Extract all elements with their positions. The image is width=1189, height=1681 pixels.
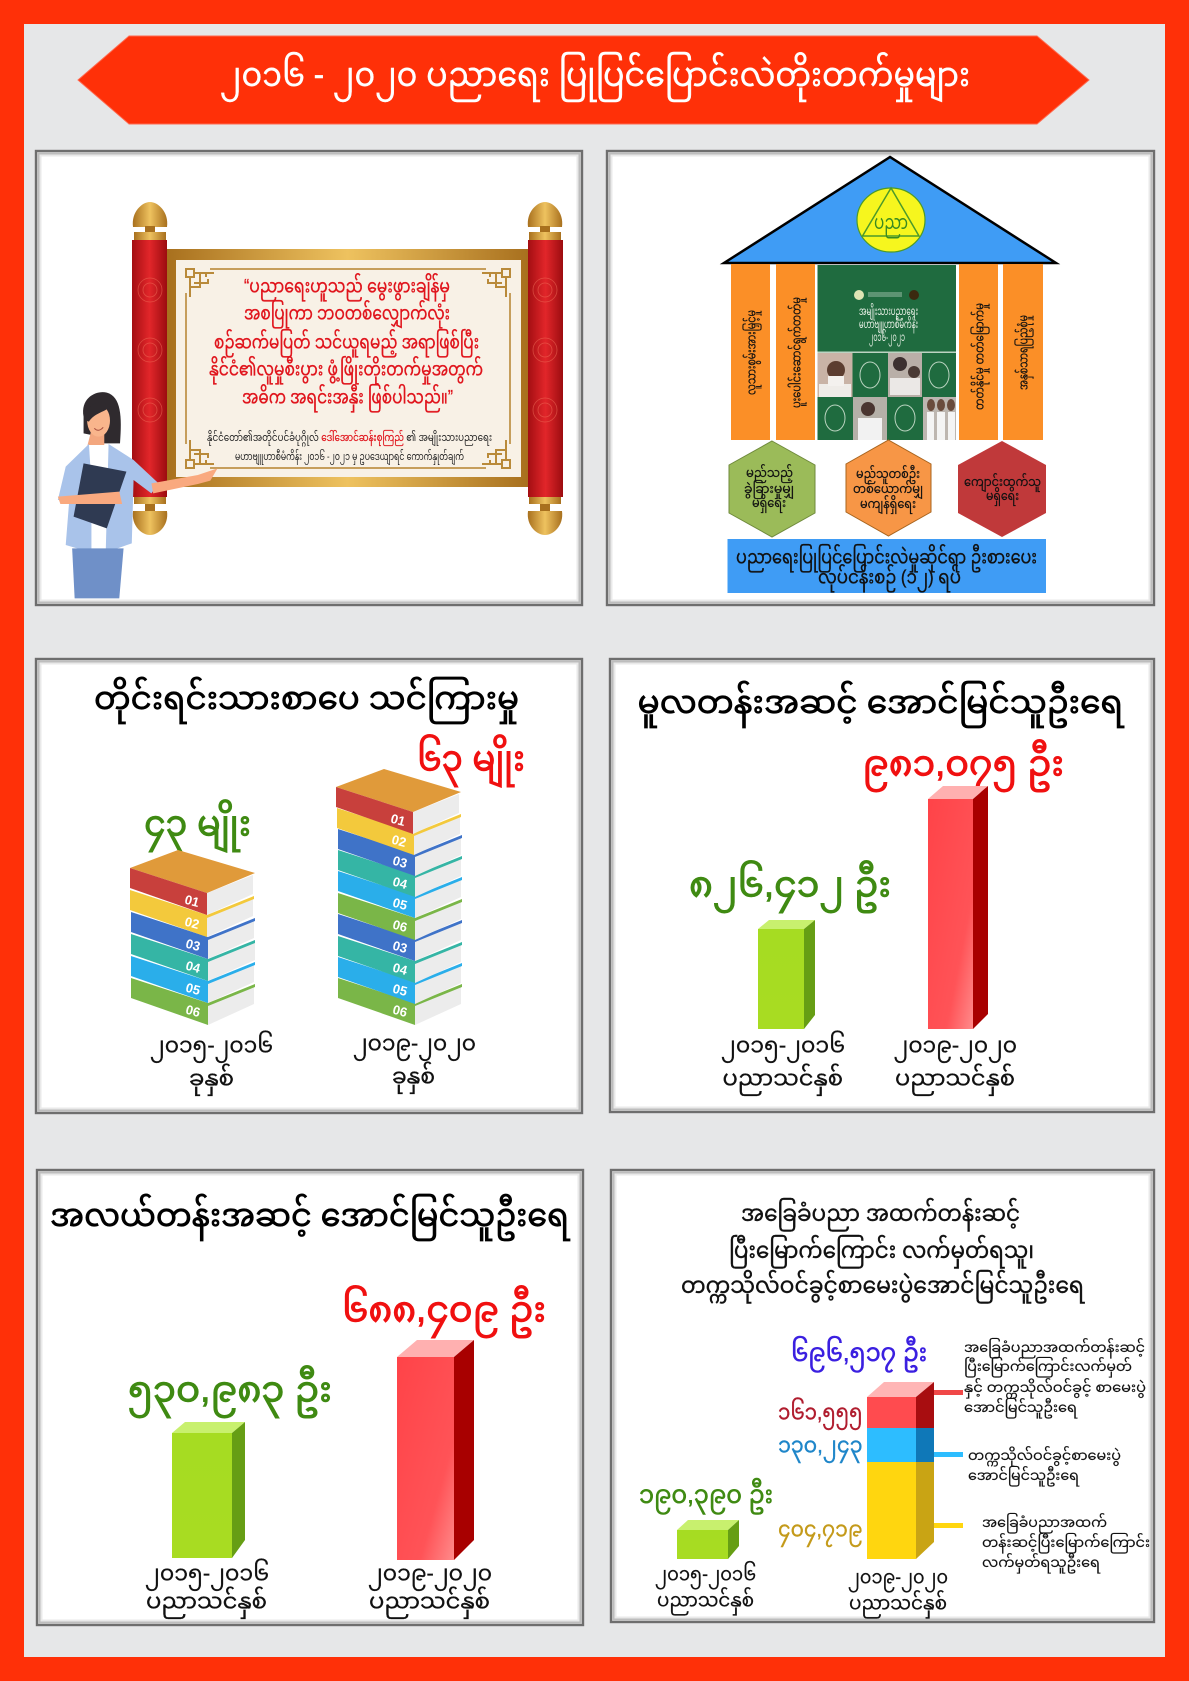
hexagon: no one left behind: တစ်ယောက်မျှ xyxy=(853,480,923,499)
bar: 2015-2016 xyxy=(677,1520,739,1559)
hexagon: no discrimination xyxy=(729,441,815,537)
legend: both: အခြေခံပညာအထက်တန်းဆင့် xyxy=(964,1337,1145,1359)
icon: tall book stack xyxy=(336,769,462,1025)
legend: completion: အခြေခံပညာအထက် xyxy=(982,1512,1107,1534)
value: 63: ၆၃ မျိုး xyxy=(417,734,525,788)
icon: small book stack: 04 xyxy=(184,958,203,976)
value: red: ၉၈၁,၀၇၅ ဦး xyxy=(862,738,1064,792)
heading: မူလတန်းအဆင့် အောင်မြင်သူဦးရေ xyxy=(638,679,1125,728)
bar: 2015-2016 xyxy=(172,1422,245,1558)
year label left: ပညာသင်နှစ် xyxy=(146,1586,267,1618)
legend: matriculation xyxy=(968,1445,1121,1487)
heading: တိုင်းရင်းသားစာပေ သင်ကြားမှု xyxy=(94,675,519,724)
quote text: “ပညာရေးဟူသည် မွေးဖွားချိန်မှ xyxy=(244,272,450,302)
roof xyxy=(724,157,1056,263)
pillar 1: လူသားစွမ်းအားမြှင့်မှု xyxy=(742,310,762,395)
plan book cover: ၂၀၁၆-၂၀၂၁ xyxy=(869,328,905,347)
quote attribution xyxy=(207,430,492,465)
year label left xyxy=(721,1030,845,1096)
year label left: ပညာသင်နှစ် xyxy=(722,1062,843,1096)
hexagon: no dropouts: ကျောင်းထွက်သူ xyxy=(964,473,1041,492)
icon: tall book stack: 04 xyxy=(391,874,410,892)
panel: ethnic language teaching xyxy=(36,659,582,1113)
icon: small book stack xyxy=(130,850,255,1025)
quote text xyxy=(209,272,483,414)
hexagon: no discrimination: ခွဲခြားမှုမျှ xyxy=(744,480,794,499)
foundation bar: ပညာရေးပြုပြင်ပြောင်းလဲမှုဆိုင်ရာ ဦးစားပေး xyxy=(736,542,1037,574)
heading: အခြေခံပညာ အထက်တန်းဆင့် xyxy=(741,1197,1020,1232)
roof: ပညာ xyxy=(874,212,908,238)
panel: high school completion and matriculation xyxy=(611,1170,1154,1622)
icon: tall book stack: 03 xyxy=(391,853,409,871)
quote text: အစပြုကာ ဘဝတစ်လျှောက်လုံး xyxy=(244,298,450,330)
value: 43: ၄၃ မျိုး xyxy=(144,798,251,852)
year label left xyxy=(145,1558,269,1618)
plan book cover: အမျိုးသားပညာရေး xyxy=(859,302,918,321)
plan book cover: မဟာဗျူဟာစီမံကိန်း xyxy=(859,315,918,334)
hexagon: no one left behind xyxy=(846,440,931,536)
hexagon: no dropouts: မရှိရေး xyxy=(986,487,1019,506)
legend: matriculation: တက္ကသိုလ်ဝင်ခွင့်စာမေးပွဲ xyxy=(968,1445,1121,1467)
segment value: blue: ၁၃၀,၂၄၃ xyxy=(778,1432,862,1462)
value: green: ၅၃၀,၉၈၃ ဦး xyxy=(128,1364,332,1418)
year label left: ၂၀၁၅-၂၀၁၆ xyxy=(655,1560,756,1590)
year label right: ၂၀၁၉-၂၀၂၀ xyxy=(353,1030,476,1060)
title banner: ၂၀၁၆ - ၂၀၂၀ ပညာရေး ပြုပြင်ပြောင်းလဲတိုးတက်မှုများ xyxy=(220,50,970,103)
quote text: နိုင်ငံ၏လူမှုစီးပွား ဖွံ့ဖြိုးတိုးတက်မှုအတွက် xyxy=(209,354,483,386)
icon: tall book stack: 02 xyxy=(390,832,408,850)
year label left: ၂၀၁၅-၂၀၁၆ xyxy=(150,1030,273,1062)
icon: small book stack: 05 xyxy=(184,980,202,998)
legend: matriculation: အောင်မြင်သူဦးရေ xyxy=(968,1465,1080,1487)
pillar 2: ပူးပေါင်းဆောင်ရွက်တတ်မှု xyxy=(788,297,806,408)
year label right xyxy=(368,1560,492,1618)
hexagon: no one left behind: မည်သူတစ်ဦး xyxy=(856,465,920,484)
icon: tall book stack: 06 xyxy=(391,917,409,935)
legend: completion: တန်းဆင့်ပြီးမြောက်ကြောင်း xyxy=(982,1532,1150,1554)
hexagon: no discrimination: မည်သည့် xyxy=(746,464,793,483)
right roller xyxy=(528,202,563,535)
icon: small book stack: 06 xyxy=(184,1002,202,1020)
icon: small book stack: 03 xyxy=(184,936,202,954)
year label right: ပညာသင်နှစ် xyxy=(895,1062,1015,1096)
year label right: ခုနှစ် xyxy=(392,1060,435,1094)
year label left: ၂၀၁၅-၂၀၁၆ xyxy=(145,1558,269,1590)
foundation bar: လုပ်ငန်းစဉ် (၁၂) ရပ် xyxy=(818,562,961,594)
bar: 2019-2020 xyxy=(397,1340,474,1560)
year label left: ပညာသင်နှစ် xyxy=(657,1586,754,1616)
icon: tall book stack: 01 xyxy=(389,811,407,829)
pillar 3: တတ်နိုင်မှု တတ်မြောက်မှု xyxy=(970,303,990,410)
bar: 2015-2016 xyxy=(758,920,815,1029)
year label left xyxy=(150,1030,273,1096)
quote attribution: နိုင်ငံတော်၏အတိုင်ပင်ခံပုဂ္ဂိုလ် ဒေါ်အောင်ဆန်းစုကြည် ၏ အမျိုးသားပညာရေး xyxy=(207,430,492,446)
hexagon: no dropouts xyxy=(958,441,1046,537)
heading: ပြီးမြောက်ကြောင်း လက်မှတ်ရသူ၊ xyxy=(729,1234,1034,1269)
stacked bar xyxy=(867,1382,934,1559)
legend: both xyxy=(964,1337,1146,1419)
legend: both: နှင့် တက္ကသိုလ်ဝင်ခွင့် စာမေးပွဲ xyxy=(964,1377,1146,1399)
foundation bar xyxy=(728,539,1046,594)
panel: scroll quote xyxy=(36,151,582,605)
year label right: ၂၀၁၉-၂၀၂၀ xyxy=(848,1568,948,1592)
year label right xyxy=(848,1568,948,1620)
segment value: red: ၁၆၁,၅၅၅ xyxy=(778,1398,862,1430)
bar: 2019-2020 xyxy=(928,786,988,1029)
leader lines xyxy=(934,1390,963,1528)
pillar 4 xyxy=(1003,264,1043,440)
icon: small book stack: 01 xyxy=(183,892,201,910)
quote attribution: မဟာဗျူဟာစီမံကိန်း ၂၀၁၆ -၂၀၂၁ မှ ဥပဒေယျာရင် ကောက်နှုတ်ချက် xyxy=(235,449,464,465)
year label left xyxy=(655,1560,756,1616)
year label left: ၂၀၁၅-၂၀၁၆ xyxy=(721,1030,845,1062)
legend: both: အောင်မြင်သူဦးရေ xyxy=(964,1397,1078,1419)
scroll parchment xyxy=(167,249,528,487)
year label left: ခုနှစ် xyxy=(189,1062,234,1096)
year label right: ၂၀၁၉-၂၀၂၀ xyxy=(894,1032,1017,1062)
heading xyxy=(681,1197,1085,1304)
value: green: ၈၂၆,၄၁၂ ဦး xyxy=(689,860,891,914)
legend: both: ပြီးမြောက်ကြောင်းလက်မှတ် xyxy=(964,1356,1132,1378)
pillar 4: အနှစ်သာရပြည့်စုံမှု xyxy=(1014,315,1034,390)
icon: tall book stack: 06 xyxy=(391,1002,409,1020)
pillar 1 xyxy=(731,264,770,440)
segment value: yellow: ၄၀၄,၇၁၉ xyxy=(778,1516,862,1546)
value: total 2019-2020: ၆၉၆,၅၁၇ ဦး xyxy=(791,1335,927,1373)
plan book cover xyxy=(818,265,956,440)
left roller xyxy=(132,202,167,535)
title banner xyxy=(78,36,1089,124)
year label right: ပညာသင်နှစ် xyxy=(849,1588,947,1620)
pillar 2 xyxy=(776,264,815,440)
value: 2015-2016: ၁၉၀,၃၉၀ ဦး xyxy=(639,1477,773,1515)
heading: အလယ်တန်းအဆင့် အောင်မြင်သူဦးရေ xyxy=(50,1192,571,1241)
year label right xyxy=(894,1032,1017,1096)
quote text: အဓိက အရင်းအနှီး ဖြစ်ပါသည်။” xyxy=(242,382,453,414)
quote text: စဉ်ဆက်မပြတ် သင်ယူရမည့် အရာဖြစ်ပြီး xyxy=(214,328,479,358)
icon: tall book stack: 05 xyxy=(391,895,409,913)
panel: primary level passers xyxy=(610,659,1154,1112)
year label right: ပညာသင်နှစ် xyxy=(369,1586,490,1618)
panel: middle level passers xyxy=(37,1170,583,1625)
hexagon: no discrimination: မရှိရေး xyxy=(752,494,786,513)
icon: tall book stack: 03 xyxy=(391,938,409,956)
icon: small book stack: 02 xyxy=(183,914,201,932)
panel: education house diagram xyxy=(607,151,1154,605)
hexagon: no one left behind: မကျန်ရှိရေး xyxy=(860,495,916,514)
legend: completion xyxy=(982,1512,1150,1574)
pillar 3 xyxy=(959,264,998,440)
legend: completion: လက်မှတ်ရသူဦးရေ xyxy=(982,1552,1101,1574)
year label right: ၂၀၁၉-၂၀၂၀ xyxy=(368,1560,492,1590)
year label right xyxy=(353,1030,476,1094)
icon: tall book stack: 05 xyxy=(391,981,409,999)
value: red: ၆၈၈,၄၀၉ ဦး xyxy=(342,1284,546,1338)
icon: teacher pointing xyxy=(58,392,217,598)
icon: tall book stack: 04 xyxy=(391,960,410,978)
heading: တက္ကသိုလ်ဝင်ခွင့်စာမေးပွဲအောင်မြင်သူဦးရေ xyxy=(681,1269,1085,1304)
